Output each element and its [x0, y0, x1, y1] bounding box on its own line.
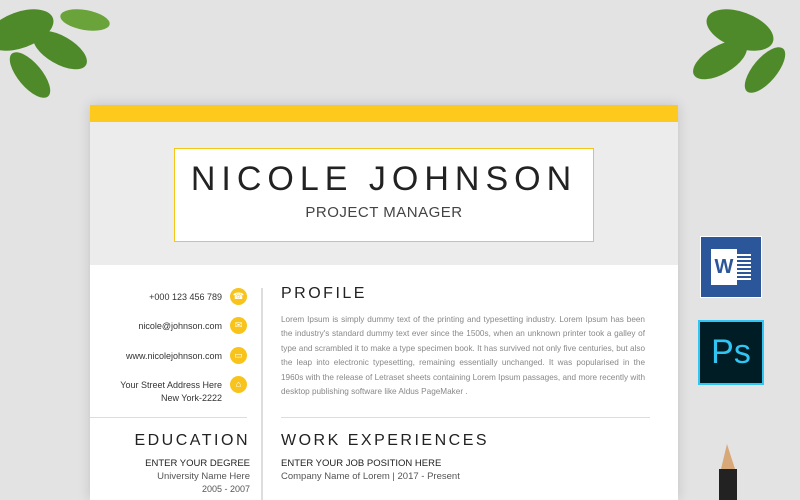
icon: photoshop	[698, 320, 764, 385]
work experiences: Company Name of Lorem | 2017 - Present	[281, 471, 460, 482]
education: 2005 - 2007	[202, 484, 250, 494]
icon: photoshop: Ps	[711, 333, 751, 371]
icon: phone	[230, 288, 247, 305]
icon: home: ⌂	[236, 379, 241, 389]
work experiences	[281, 432, 489, 482]
plant right	[693, 9, 786, 93]
profile text: Lorem Ipsum is simply dummy text of the printing and typesetting industry. Lorem Ipsum has been the industry's standard dummy text ever since the 1500s, when an unknown printer took a galley of type and scrambled it to make a type specimen book. It has survived not only five centuries, but also the leap into electronic typesetting, remaining essentially unchanged. It was popularised in the 1960s with the release of Letraset sheets containing Lorem Ipsum passages, and more recently with desktop publishing software like Aldus PageMaker .	[281, 315, 645, 396]
contact block	[120, 292, 222, 403]
icon: web: ▭	[234, 350, 243, 360]
contact block: +000 123 456 789	[149, 292, 222, 302]
icon: word	[700, 236, 762, 298]
icon: home	[230, 376, 247, 393]
plant left	[0, 9, 110, 98]
education: EDUCATION	[134, 432, 250, 449]
work experiences: ENTER YOUR JOB POSITION HERE	[281, 458, 441, 469]
profile heading: PROFILE	[281, 285, 367, 302]
name box: PROJECT MANAGER	[305, 204, 463, 221]
education: ENTER YOUR DEGREE	[145, 458, 250, 469]
contact block: www.nicolejohnson.com	[126, 351, 222, 361]
education	[134, 432, 250, 494]
name box	[174, 148, 594, 242]
icon: mail: ✉	[235, 320, 242, 330]
name box: NICOLE JOHNSON	[191, 160, 577, 198]
icon: mail	[230, 317, 247, 334]
resume paper	[90, 105, 678, 500]
work experiences: WORK EXPERIENCES	[281, 432, 489, 449]
icon: word: W	[715, 256, 733, 278]
pencil	[719, 444, 737, 500]
yellow bar	[90, 105, 678, 122]
icon: web	[230, 347, 247, 364]
header band	[90, 122, 678, 265]
education: University Name Here	[157, 471, 250, 482]
contact block: Your Street Address Here	[120, 380, 222, 390]
icon: phone: ☎	[233, 291, 244, 301]
contact block: New York-2222	[161, 393, 222, 403]
contact block: nicole@johnson.com	[138, 321, 222, 331]
